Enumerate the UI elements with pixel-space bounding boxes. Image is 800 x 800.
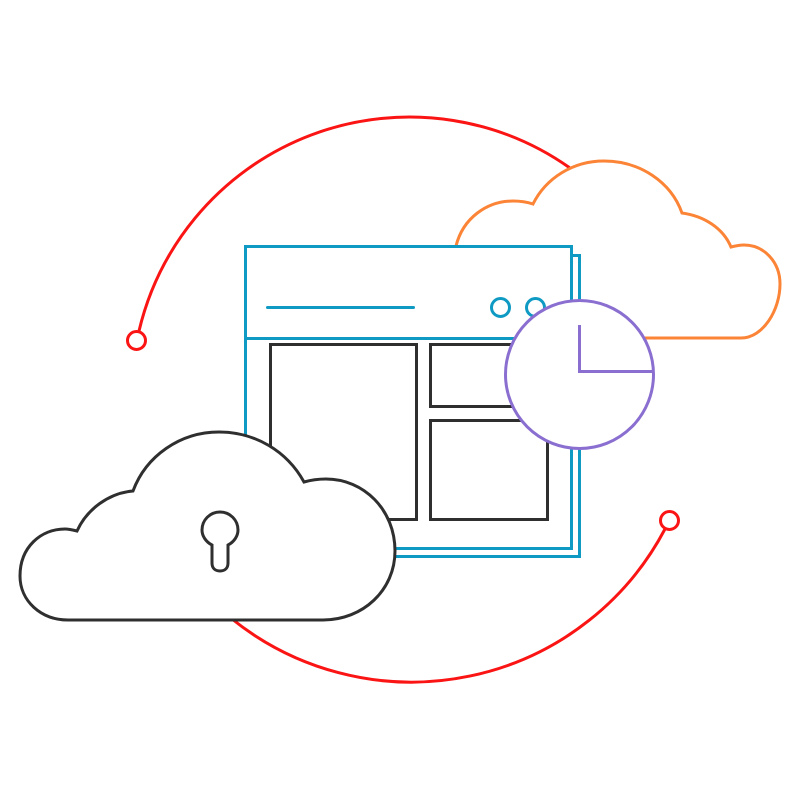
- icon: keyhole: [202, 512, 238, 571]
- arc: red upper: [138, 116, 570, 331]
- chart: purple pie clock: [504, 299, 655, 450]
- window: title bar line: [266, 306, 415, 309]
- window: control button two: [525, 297, 546, 318]
- window: browser frame: [244, 245, 573, 550]
- panel: small top content: [429, 343, 560, 408]
- window: back page: [254, 254, 581, 558]
- chart: quarter segment: [578, 325, 654, 373]
- icon: orange cloud: [454, 160, 782, 340]
- icon: dark cloud with keyhole: [18, 430, 396, 622]
- window: header divider: [247, 337, 570, 340]
- panel: large content: [269, 343, 418, 521]
- arc: red lower: [233, 528, 666, 684]
- window: control button one: [490, 297, 511, 318]
- panel: lower right content: [429, 419, 549, 521]
- dot: red lower arc end: [659, 510, 680, 531]
- dot: red upper arc end: [126, 330, 147, 351]
